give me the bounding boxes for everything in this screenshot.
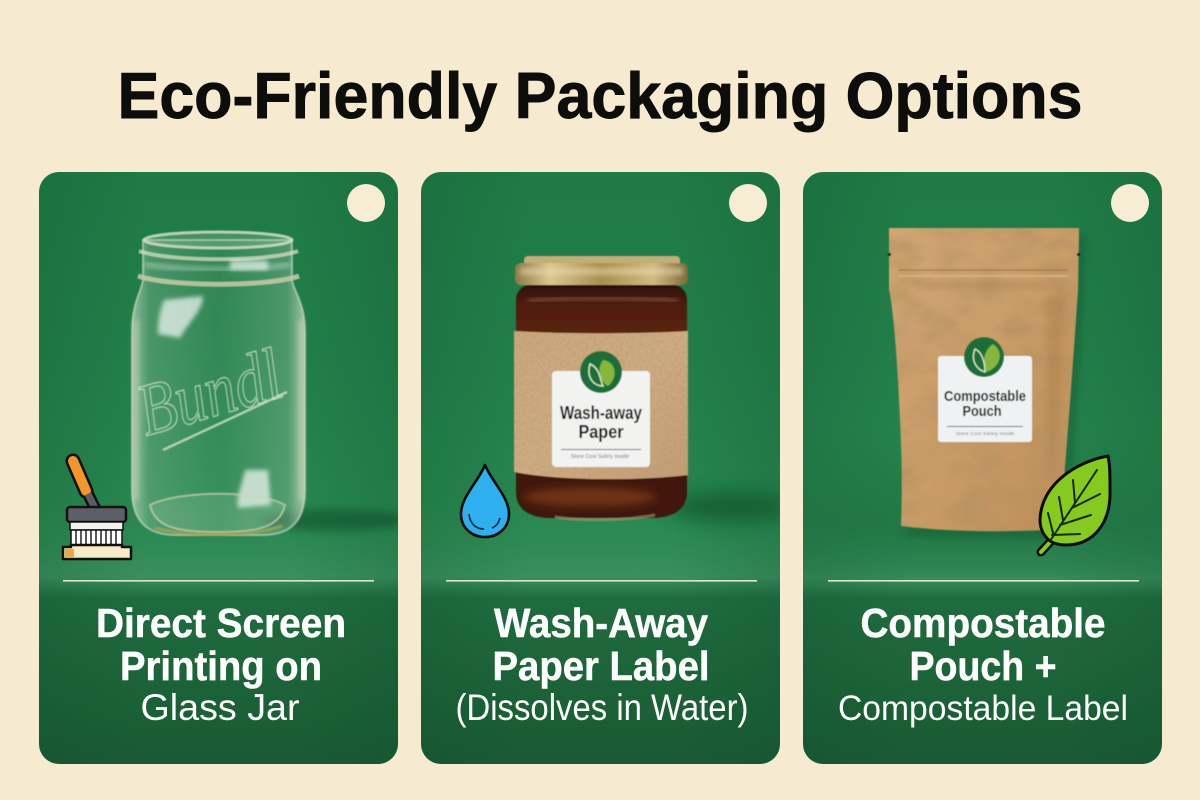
caption xyxy=(838,600,1128,728)
title: Eco-Friendly Packaging Options xyxy=(118,59,1082,132)
divider xyxy=(63,580,374,582)
white product label xyxy=(938,337,1032,442)
panel: direct screen printing on glass jar xyxy=(39,172,410,764)
icon: water drop xyxy=(461,465,509,537)
caption xyxy=(96,600,346,728)
divider xyxy=(828,580,1139,582)
caption: Printing on xyxy=(120,643,322,689)
photo: clear glass jar xyxy=(128,232,305,535)
caption: Compostable Label xyxy=(838,689,1128,728)
caption: Compostable xyxy=(860,600,1106,646)
white product label: Compostable xyxy=(944,388,1026,405)
caption: Direct Screen xyxy=(96,600,346,646)
caption xyxy=(456,600,748,728)
white product label: Paper xyxy=(578,422,624,442)
pouch shadow xyxy=(905,235,1080,534)
marker circle xyxy=(1111,184,1149,222)
caption: Pouch + xyxy=(910,643,1056,689)
kraft label xyxy=(514,331,688,479)
gold lid xyxy=(515,256,688,285)
caption: Glass Jar xyxy=(140,687,300,728)
white product label: Wash-away xyxy=(560,403,642,423)
white product label: Pouch xyxy=(962,403,1002,420)
marker circle xyxy=(347,184,385,222)
photo: kraft pouch xyxy=(888,228,1080,531)
caption: (Dissolves in Water) xyxy=(456,687,748,728)
panel: compostable pouch and label xyxy=(803,172,1162,764)
caption: Wash-Away xyxy=(494,600,708,646)
icon: leaf xyxy=(1040,456,1110,552)
marker circle xyxy=(729,184,767,222)
embossed script on jar: Bundl xyxy=(128,333,291,452)
white product label xyxy=(552,351,650,467)
white product label: Store Cool Safely Inside xyxy=(956,431,1014,436)
white product label: Store Cool Safely Inside xyxy=(571,454,629,460)
jar shadow xyxy=(260,509,410,531)
icon: paint brush xyxy=(63,461,131,559)
jar shadow xyxy=(668,493,792,521)
photo: amber jar with kraft label xyxy=(514,256,688,520)
divider xyxy=(446,580,757,582)
panel: wash-away paper label xyxy=(421,172,792,764)
caption: Paper Label xyxy=(492,643,710,689)
